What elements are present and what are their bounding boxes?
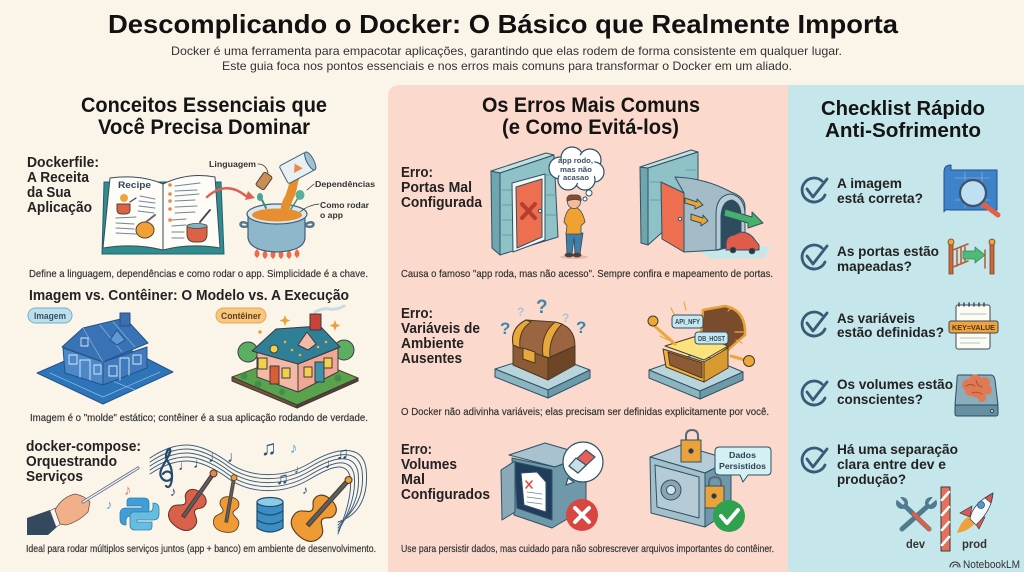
title: Descomplicando o Docker: O Básico que Realmente Importa (108, 9, 899, 39)
icon: locked chest: ? (500, 319, 510, 338)
icon: pot with ingredients (240, 150, 318, 259)
panel: checklist (788, 85, 1024, 572)
icon: closed door in wall (491, 153, 558, 255)
icon: locked chest: ? (536, 297, 548, 318)
icon: blueprint house (37, 313, 173, 404)
subheading: portas (401, 165, 483, 211)
icon: music staff: ♫ (276, 469, 289, 488)
item: variáveis definidas: estão definidas? (837, 325, 944, 340)
icon: brain drive (955, 374, 998, 416)
subheading: volumes: Erro: (401, 442, 432, 458)
item: separação dev e produção: clara entre dev e (837, 457, 946, 472)
caption: variáveis: O Docker não adivinha variáveis; elas precisam ser definidas explicitamente por você. (401, 406, 769, 418)
item: imagem correta (802, 176, 923, 206)
labels: dockerfile ingredients: Dependências (315, 179, 375, 189)
icon: music staff (106, 437, 367, 534)
icon: music staff: ♫ (336, 444, 349, 463)
pill: imagem: Imagem (34, 311, 66, 321)
callout: eraser bubble (563, 442, 603, 485)
item: separação dev e produção: produção? (837, 472, 906, 487)
logo: notebooklm: NotebookLM (963, 559, 1020, 571)
item: volumes conscientes: Os volumes estão (837, 377, 953, 392)
subheading: portas: Configurada (401, 195, 483, 211)
heading: checklist (821, 98, 985, 142)
callout: dados persistidos: Persistidos (719, 461, 766, 471)
labels: dockerfile ingredients: Como rodar (320, 200, 370, 210)
icon: open chest with keys: API_NFY (675, 319, 700, 326)
icon: key value note (949, 303, 998, 349)
icon: gate with arrow (948, 239, 995, 274)
icon: crossed tools (896, 497, 937, 529)
icon: locked safe (650, 430, 731, 527)
icon: red x badge (566, 499, 598, 531)
caption: imagem vs contêiner: Imagem é o "molde" estático; contêiner é a sua aplicação rodando de verdade. (30, 412, 368, 424)
label: prod: prod (962, 537, 987, 551)
labels: dockerfile ingredients: o app (320, 210, 343, 220)
icon: music staff: ♪ (290, 440, 298, 457)
subheading: variáveis (401, 306, 480, 367)
subheading: volumes: Configurados (401, 487, 490, 503)
icon: rocket (957, 493, 993, 533)
icon: music staff: ♪ (302, 483, 308, 497)
icon: music staff: ♩ (325, 455, 339, 471)
heading: erros (482, 94, 700, 139)
item: portas mapeadas: mapeadas? (837, 259, 912, 274)
subtitle: Este guia foca nos pontos essenciais e nos erros mais comuns para transformar o Docker em um aliado. (222, 59, 792, 73)
heading: erros: (e Como Evitá-los) (502, 116, 679, 139)
pill: contêiner (216, 308, 266, 323)
icon: conductor hand and baton (27, 468, 138, 535)
caption: portas: Causa o famoso "app roda, mas não acesso". Sempre confira e mapeamento de portas. (401, 268, 773, 280)
pill: contêiner: Contêiner (221, 311, 261, 321)
subheading: docker-compose: Serviços (26, 469, 83, 485)
item: portas mapeadas: As portas estão (837, 244, 939, 259)
item: volumes conscientes: conscientes? (837, 392, 923, 407)
subheading: docker-compose: docker-compose: (26, 439, 141, 455)
icon: music staff: ♩ (294, 462, 306, 476)
icon: running house (232, 306, 358, 408)
heading: conceitos: Conceitos Essenciais que (81, 94, 327, 117)
subheading: volumes: Mal (401, 472, 425, 488)
icon: confused person (560, 195, 588, 259)
subheading: variáveis: Ausentes (401, 351, 462, 367)
icon: music staff: ♫ (261, 437, 277, 460)
callout: thought bubble (549, 147, 604, 201)
icon: music staff: ♪ (170, 484, 176, 499)
subheading: variáveis: Ambiente (401, 336, 464, 352)
icon: barrier (941, 487, 950, 551)
subheading: dockerfile: da Sua (27, 185, 72, 201)
panel: erros comuns (388, 85, 788, 572)
subheading: docker-compose: Orquestrando (26, 454, 117, 470)
item: separação dev e produção: Há uma separação (837, 442, 958, 457)
item: portas mapeadas (802, 244, 939, 274)
subheading: dockerfile (27, 155, 99, 216)
icon: open chest with keys (648, 302, 754, 399)
item: separação dev e produção (802, 442, 958, 487)
icon: red violin (164, 462, 228, 535)
icon: green check badge (713, 500, 745, 532)
item: variáveis definidas: As variáveis (837, 311, 915, 326)
caption: volumes: Use para persistir dados, mas cuidado para não sobrescrever arquivos importantes do contêiner. (401, 543, 774, 555)
caption: docker-compose: Ideal para rodar múltiplos serviços juntos (app + banco) em ambiente de desenvolvimento. (26, 543, 376, 555)
heading: checklist: Checklist Rápido (821, 98, 985, 120)
callout: dados persistidos: Dados (729, 450, 756, 460)
icon: music staff: ♪ (124, 482, 132, 499)
icon: open door and tunnel (640, 150, 770, 259)
icon: open chest with keys: DB_HOST (698, 336, 726, 343)
icon: locked chest: ? (576, 318, 586, 337)
icon: locked chest: ? (517, 305, 524, 319)
icon: open safe with document (501, 443, 586, 528)
item: imagem correta: está correta? (837, 191, 923, 206)
icon: python logo (120, 498, 159, 530)
heading: conceitos: Você Precisa Dominar (98, 116, 310, 139)
icon: database (257, 498, 283, 532)
subheading: dockerfile: Aplicação (27, 200, 92, 216)
icon: blueprint magnifier (944, 165, 998, 215)
subheading: portas: Erro: (401, 165, 433, 181)
icon: music staff: ♩ (208, 449, 224, 466)
icon: locked chest: ? (562, 311, 569, 325)
subheading: portas: Portas Mal (401, 180, 472, 196)
subheading: volumes: Volumes (401, 457, 457, 473)
heading: checklist: Anti-Sofrimento (825, 120, 981, 142)
subtitle: Docker é uma ferramenta para empacotar aplicações, garantindo que elas rodem de forma consistente em qualquer lugar. (171, 44, 842, 58)
panel: conceitos essenciais (26, 94, 376, 555)
icon: recipe book (102, 176, 224, 254)
callout: thought bubble: mas não (560, 165, 592, 174)
subheading: dockerfile: A Receita (27, 170, 90, 186)
subheading: variáveis: Erro: (401, 306, 433, 322)
subheading: docker-compose (26, 439, 141, 485)
caption: dockerfile: Define a linguagem, dependências e como rodar o app. Simplicidade é a chave. (29, 268, 368, 280)
arrow: book to pot (207, 188, 246, 197)
subheading: variáveis: Variáveis de (401, 321, 480, 337)
subtitle (171, 44, 842, 73)
icon: music staff: ♩ (227, 449, 243, 466)
item: volumes conscientes (802, 377, 953, 407)
item: variáveis definidas (802, 311, 944, 340)
icon: locked chest (495, 297, 590, 398)
callout: thought bubble: acasao (563, 173, 589, 182)
subheading: dockerfile: Dockerfile: (27, 155, 99, 171)
subheading: imagem vs contêiner: Imagem vs. Contêiner: O Modelo vs. A Execução (29, 288, 349, 304)
icon: recipe book: Recipe (118, 180, 151, 191)
icon: orange violin (212, 473, 247, 534)
icon: big violin (286, 466, 364, 547)
icon: key value note: KEY=VALUE (952, 323, 995, 332)
callout: dados persistidos (715, 447, 771, 482)
callout: thought bubble: app rodo, (558, 156, 593, 165)
icon: music staff: ♩ (178, 457, 192, 473)
pill: imagem (28, 308, 72, 323)
icon: music staff: ♩ (193, 455, 208, 472)
item: imagem correta: A imagem (837, 176, 902, 191)
label: dev: dev (906, 537, 925, 551)
subheading: volumes (401, 442, 490, 503)
heading: erros: Os Erros Mais Comuns (482, 94, 700, 117)
labels: dockerfile ingredients: Linguagem (209, 159, 256, 169)
icon: music staff: ♪ (106, 497, 112, 512)
labels: dockerfile ingredients (209, 159, 375, 220)
heading: conceitos (81, 94, 327, 139)
